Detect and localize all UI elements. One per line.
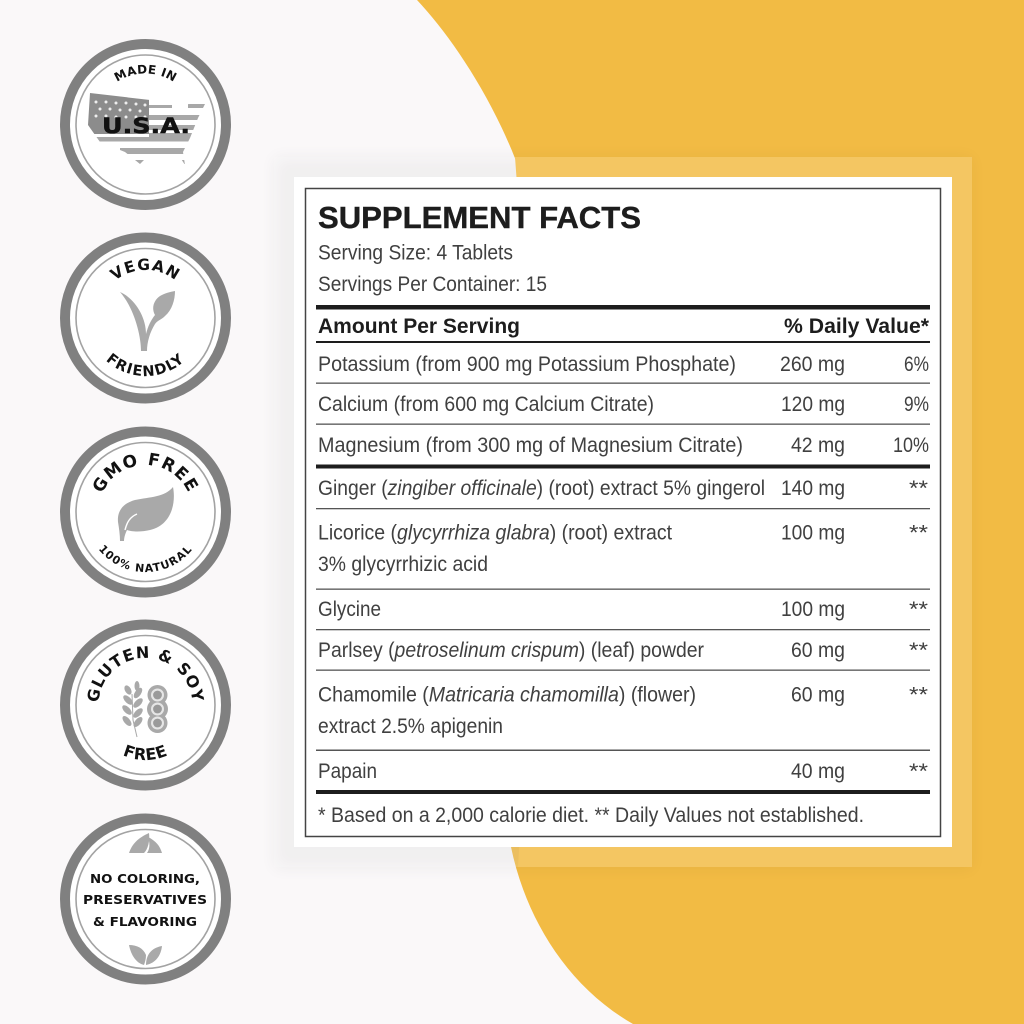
column headings xyxy=(318,315,930,338)
panel: supplement facts table xyxy=(306,188,940,836)
footnote: * Based on a 2,000 calorie diet. ** Daily Values not established. xyxy=(318,804,864,827)
serving size: Serving Size: 4 Tablets xyxy=(318,242,513,264)
column headings: % Daily Value* xyxy=(784,315,930,338)
row: magnesium: 10% xyxy=(893,434,929,457)
row: chamomile xyxy=(318,684,928,738)
row: papain: 40 mg xyxy=(791,760,845,783)
badge: no coloring xyxy=(65,818,226,980)
icon: top leaves xyxy=(129,833,162,853)
row: papain: ** xyxy=(909,760,928,783)
row: calcium: 120 mg xyxy=(781,393,845,416)
row: parsley xyxy=(318,639,928,662)
badge: gmo free xyxy=(60,426,231,598)
panel: soft shadow xyxy=(274,157,972,869)
table border xyxy=(306,188,940,836)
badge: gluten and soy free xyxy=(60,620,231,790)
badge text: no coloring: NO COLORING, xyxy=(90,872,200,886)
row: glycine: Glycine xyxy=(318,598,381,621)
column headings: Amount Per Serving xyxy=(318,315,520,338)
row: licorice: ** xyxy=(909,522,928,544)
icon: bottom leaves xyxy=(129,945,162,965)
row: chamomile: 60 mg xyxy=(791,684,845,706)
badge text: friendly: FRIENDLY xyxy=(106,352,182,376)
row: potassium: 6% xyxy=(904,353,929,376)
row: magnesium: Magnesium (from 300 mg of Magnesium Citrate) xyxy=(318,434,743,457)
title: SUPPLEMENT FACTS xyxy=(318,200,641,235)
panel: translucent frame xyxy=(274,157,972,867)
row: calcium: Calcium (from 600 mg Calcium Citrate) xyxy=(318,393,654,416)
row: magnesium: 42 mg xyxy=(791,434,845,457)
badge: made in usa xyxy=(60,39,231,210)
row: licorice: 100 mg xyxy=(781,522,845,544)
row: parsley: ** xyxy=(909,639,928,662)
row: licorice xyxy=(318,522,928,576)
row: potassium: Potassium (from 900 mg Potassium Phosphate) xyxy=(318,353,736,376)
servings per container: Servings Per Container: 15 xyxy=(318,273,547,296)
row: papain xyxy=(318,760,928,783)
row: ginger: Ginger (zingiber officinale) (root) extract 5% gingerol xyxy=(318,477,765,500)
row: glycine: ** xyxy=(909,598,928,621)
row: calcium xyxy=(318,393,929,416)
row: chamomile: ** xyxy=(909,684,928,706)
badge text: preservatives: PRESERVATIVES xyxy=(83,893,207,907)
row: chamomile: extract 2.5% apigenin xyxy=(318,715,503,738)
panel: white card xyxy=(294,177,952,847)
badge text: 100% natural: 100% NATURAL xyxy=(99,544,192,572)
row: chamomile: Chamomile (Matricaria chamomilla) (flower) xyxy=(318,684,696,706)
rules xyxy=(316,305,930,794)
icon: v leaf xyxy=(120,291,175,351)
badge text: free: FREE xyxy=(124,744,167,760)
row: licorice: 3% glycyrrhizic acid xyxy=(318,553,488,576)
icon: soy pod xyxy=(147,685,168,733)
icon: leaf xyxy=(118,487,174,541)
badge text: and flavoring: & FLAVORING xyxy=(93,915,197,929)
row: potassium: 260 mg xyxy=(780,353,845,376)
row: glycine: 100 mg xyxy=(781,598,845,621)
badge text: u.s.a.: U.S.A. xyxy=(102,114,190,138)
row: calcium: 9% xyxy=(904,393,929,416)
row: parsley: 60 mg xyxy=(791,639,845,662)
icon: wheat xyxy=(121,681,144,737)
row: licorice: Licorice (glycyrrhiza glabra) (root) extract xyxy=(318,522,672,544)
badge text: made in: MADE IN xyxy=(114,64,177,82)
icon: usa flag map xyxy=(88,93,209,164)
badge text: gmo free: GMO FREE xyxy=(94,452,198,492)
row: parsley: Parlsey (petroselinum crispum) (leaf) powder xyxy=(318,639,704,662)
row: ginger: ** xyxy=(909,477,928,500)
badge text: vegan: VEGAN xyxy=(108,258,180,280)
row: glycine xyxy=(318,598,928,621)
yellow wave background xyxy=(417,0,1024,1024)
row: ginger: 140 mg xyxy=(781,477,845,500)
badge: vegan friendly xyxy=(60,232,231,404)
row: papain: Papain xyxy=(318,760,377,783)
badge text: gluten and soy: GLUTEN & SOY xyxy=(88,646,204,701)
